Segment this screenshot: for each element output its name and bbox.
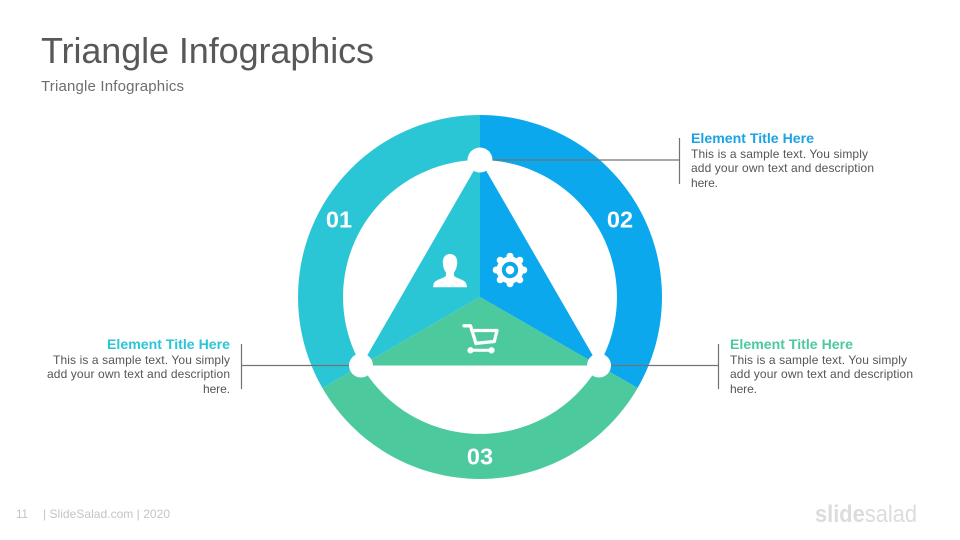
text block: element 02: here. — [691, 176, 718, 190]
text block: element 01: Element Title Here — [107, 336, 230, 352]
text block: element 03 — [730, 336, 913, 396]
logo: slidesalad: slidesalad — [815, 501, 917, 528]
text block: element 01: add your own text and description — [47, 367, 230, 381]
text block: element 01: here. — [203, 382, 230, 396]
subtitle: Triangle Infographics — [41, 78, 184, 95]
icon: gear — [496, 256, 524, 284]
node: left — [349, 354, 373, 378]
triangle slice: gear — [480, 160, 599, 366]
text block: element 03: This is a sample text. You simply — [730, 353, 907, 367]
icon: shopping cart — [464, 326, 497, 352]
number 02: 02 — [607, 206, 633, 232]
connector: top to element 02 — [480, 138, 680, 184]
text block: element 01: This is a sample text. You simply — [53, 353, 230, 367]
ring segment 02 — [480, 115, 662, 388]
ring diagram — [298, 115, 662, 479]
text block: element 02 — [691, 130, 874, 190]
ring segment 03 — [322, 366, 638, 479]
number 03: 03 — [467, 444, 493, 470]
footer text: | SlideSalad.com | 2020 — [43, 507, 170, 521]
triangle slice: cart — [361, 297, 599, 366]
node: right — [587, 354, 611, 378]
connector: right to element 03 — [599, 344, 718, 389]
title: Triangle Infographics — [41, 30, 374, 71]
text block: element 02: Element Title Here — [691, 130, 814, 146]
text block: element 01 — [47, 336, 230, 396]
text block: element 03: here. — [730, 382, 757, 396]
text block: element 02: add your own text and description — [691, 161, 874, 175]
connector: left to element 01 — [241, 344, 361, 389]
page number: 11 — [16, 507, 28, 521]
text block: element 02: This is a sample text. You simply — [691, 147, 868, 161]
node: top — [468, 148, 492, 172]
text block: element 03: Element Title Here — [730, 336, 853, 352]
text block: element 03: add your own text and description — [730, 367, 913, 381]
triangle slice: person — [361, 160, 480, 366]
ring segment 01 — [298, 115, 480, 388]
icon: person — [433, 254, 467, 287]
number 01: 01 — [326, 206, 352, 232]
